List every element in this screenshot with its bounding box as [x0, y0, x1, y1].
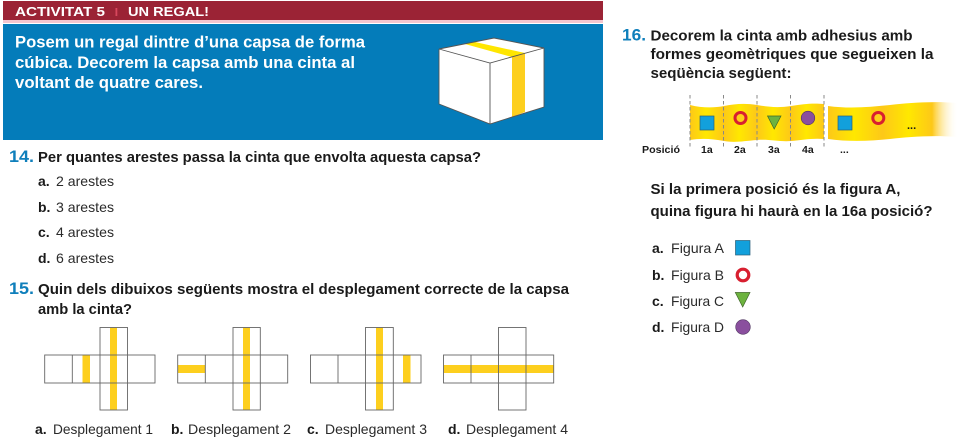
answer options 16: Figura C	[671, 293, 724, 309]
icon: red ring repeat	[873, 112, 884, 124]
icon: option ring	[737, 269, 749, 281]
icon: option square	[736, 240, 750, 255]
header bar: activity title: ACTIVITAT 5	[15, 5, 105, 19]
position dividers	[690, 95, 824, 148]
net b: desplegament 2: b.	[171, 421, 183, 437]
intro text: cúbica. Decorem la capsa amb una cinta al	[15, 54, 355, 72]
net a: desplegament 1	[35, 328, 155, 437]
intro text: voltant de quatre cares.	[15, 74, 203, 92]
icon: blue square repeat	[838, 116, 852, 130]
answer options 14	[38, 173, 114, 266]
net d: desplegament 4: d.	[448, 421, 460, 437]
answer options 16: Figura B	[671, 267, 724, 283]
header bar: activity title: UN REGAL!	[128, 5, 209, 19]
continuation dots: ...	[907, 120, 916, 132]
net d: desplegament 4	[444, 328, 568, 437]
net c: desplegament 3: Desplegament 3	[325, 421, 427, 437]
net c: desplegament 3	[307, 328, 427, 437]
net c: desplegament 3: c.	[307, 421, 319, 437]
icon: option triangle	[735, 292, 750, 307]
question 16: Decorem la cinta amb adhesius amb	[650, 28, 912, 44]
question 15	[9, 280, 570, 318]
question 14: 14.	[9, 148, 34, 166]
answer options 14: 6 arestes	[56, 250, 114, 266]
question 16: formes geomètriques que segueixen la	[650, 46, 934, 63]
icon: option circle	[736, 320, 750, 334]
answer options 14: c.	[38, 224, 50, 240]
question 16: 16.	[622, 26, 646, 44]
question 14	[9, 148, 481, 266]
icon: green triangle	[768, 116, 781, 129]
position labels: ...	[840, 144, 849, 156]
answer options 14: a.	[38, 173, 50, 189]
position labels: 3a	[768, 144, 780, 156]
intro text: Posem un regal dintre d’una capsa de forma	[15, 34, 366, 52]
answer options 16: Figura D	[671, 319, 724, 335]
ribbon sequence diagram	[642, 95, 958, 156]
position labels	[642, 144, 849, 156]
position labels: 4a	[802, 144, 814, 156]
answer options 14: 3 arestes	[56, 199, 114, 215]
answer options 16: b.	[652, 267, 664, 283]
question 16: seqüència següent:	[650, 65, 792, 82]
answer options 14: b.	[38, 199, 50, 215]
sub-question: Si la primera posició és la figura A,	[650, 181, 900, 198]
intro text	[15, 34, 366, 92]
net b: desplegament 2	[171, 328, 291, 437]
answer options 16: d.	[652, 319, 664, 335]
net a: desplegament 1: a.	[35, 421, 47, 437]
sub-question	[650, 181, 932, 220]
ribbon	[690, 104, 824, 142]
answer options 16: c.	[652, 293, 664, 309]
question 14: Per quantes arestes passa la cinta que envolta aquesta capsa?	[38, 149, 481, 166]
icon: purple circle	[801, 111, 815, 125]
net b: desplegament 2: Desplegament 2	[188, 421, 291, 437]
answer options 16: Figura A	[671, 240, 725, 256]
header bar: activity title	[3, 1, 603, 23]
question 16	[622, 26, 934, 82]
net a: desplegament 1: Desplegament 1	[53, 421, 153, 437]
net d: desplegament 4: Desplegament 4	[466, 421, 568, 437]
question 15: 15.	[9, 280, 34, 298]
answer options 16: a.	[652, 240, 664, 256]
panel: intro with gift box	[3, 24, 603, 140]
answer options 14: 4 arestes	[56, 224, 114, 240]
icon: red ring	[735, 112, 746, 124]
answer options 14: d.	[38, 250, 50, 266]
question 15: amb la cinta?	[38, 301, 132, 318]
icon: blue square	[700, 116, 714, 130]
sub-question: quina figura hi haurà en la 16a posició?	[650, 203, 932, 220]
answer options 14: 2 arestes	[56, 173, 114, 189]
answer options 16	[652, 240, 750, 335]
position labels: 2a	[734, 144, 746, 156]
position labels: 1a	[701, 144, 713, 156]
icon: cube gift box with ribbon	[439, 38, 544, 124]
position labels: Posició	[642, 144, 680, 156]
question 15: Quin dels dibuixos següents mostra el desplegament correcte de la capsa	[38, 281, 570, 298]
